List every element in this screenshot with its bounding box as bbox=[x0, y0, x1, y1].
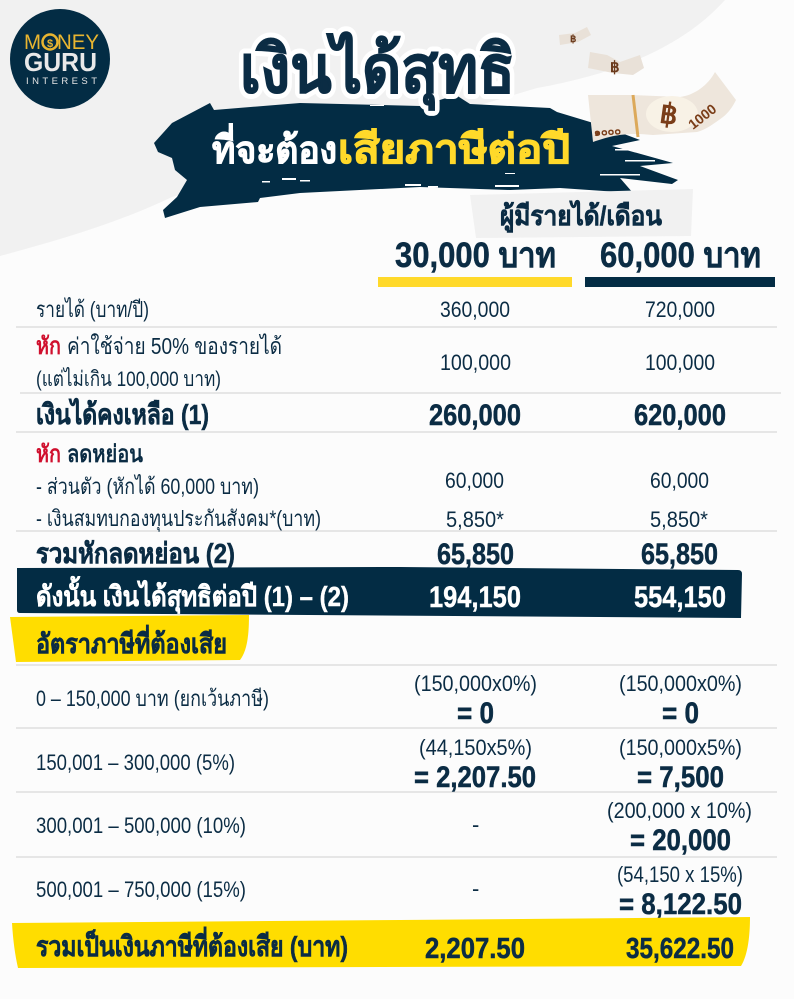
row: expense deduction: หัก bbox=[36, 333, 61, 360]
row: bracket 0%: (150,000x0%) bbox=[414, 671, 537, 696]
row: bracket 0% bbox=[36, 671, 742, 730]
icon: small banknote: ฿ bbox=[570, 34, 576, 45]
row: bracket 15%: = 8,122.50 bbox=[619, 888, 742, 921]
row: income: 720,000 bbox=[645, 297, 715, 322]
logo: $ bbox=[47, 38, 53, 50]
title line 2: ที่จะต้อง bbox=[212, 123, 337, 172]
row: expense deduction: 100,000 bbox=[440, 350, 511, 375]
tab: tax rates heading: อัตราภาษีที่ต้องเสีย bbox=[36, 624, 227, 659]
icon: small banknote bbox=[559, 27, 591, 45]
column header: 60,000: 60,000 บาท bbox=[600, 236, 761, 275]
row: bracket 0%: 0 – 150,000 บาท (ยกเว้นภาษี) bbox=[36, 686, 269, 711]
column header label box bbox=[470, 189, 693, 238]
row: allowances: - ส่วนตัว (หักได้ 60,000 บาท) bbox=[36, 474, 259, 499]
row: expense deduction: (แต่ไม่เกิน 100,000 บาท) bbox=[36, 367, 221, 391]
row: allowances bbox=[36, 441, 709, 532]
row: total allowances: 65,850 bbox=[437, 538, 514, 571]
logo: GURU bbox=[24, 47, 97, 77]
icon: medium banknote: ฿ bbox=[610, 59, 620, 76]
title line 1: เงินได้สุทธิ bbox=[240, 31, 515, 111]
row: bracket 10%: - bbox=[472, 812, 479, 837]
icon: large banknote: ฿ bbox=[658, 97, 680, 131]
row: remaining income: 260,000 bbox=[429, 399, 521, 432]
row: allowances: 60,000 bbox=[445, 468, 504, 493]
row: bracket 10%: (200,000 x 10%) bbox=[607, 798, 752, 823]
row: remaining income: 620,000 bbox=[634, 399, 726, 432]
tab: tax rates heading bbox=[10, 615, 249, 662]
row: allowances: 60,000 bbox=[650, 468, 709, 493]
band: total tax: รวมเป็นเงินภาษีที่ต้องเสีย (บาท) bbox=[36, 926, 348, 962]
row: bracket 5%: = 2,207.50 bbox=[414, 761, 536, 794]
brush stroke bbox=[154, 95, 678, 218]
logo: MONEY bbox=[24, 31, 99, 54]
row: expense deduction: 100,000 bbox=[645, 350, 715, 375]
row: expense deduction bbox=[36, 333, 715, 391]
row: allowances: 5,850* bbox=[650, 507, 708, 532]
logo bbox=[10, 9, 110, 109]
band: total tax: 35,622.50 bbox=[626, 933, 734, 965]
icon: large banknote: 1000 bbox=[685, 100, 720, 132]
row: bracket 10%: 300,001 – 500,000 (10%) bbox=[36, 813, 246, 838]
row: bracket 0%: (150,000x0%) bbox=[619, 671, 742, 696]
row: bracket 15%: (54,150 x 15%) bbox=[617, 862, 743, 887]
icon: large banknote: ๑๐๐๐ bbox=[594, 125, 622, 139]
column header: 60,000 bbox=[585, 236, 775, 287]
row: bracket 10% bbox=[36, 798, 752, 857]
row: allowances: ลดหย่อน bbox=[67, 441, 143, 468]
row: bracket 0%: = 0 bbox=[662, 697, 699, 730]
title line 1: เงินได้สุทธิ bbox=[240, 31, 515, 111]
icon: large banknote bbox=[588, 72, 736, 142]
band: net income: 194,150 bbox=[429, 581, 521, 614]
title line 2: เสียภาษีต่อปี bbox=[338, 128, 570, 172]
row: bracket 5%: (150,000x5%) bbox=[619, 735, 742, 760]
band: net income bbox=[17, 567, 742, 618]
column header label box: ผู้มีรายได้/เดือน bbox=[500, 200, 662, 233]
row: income: รายได้ (บาท/ปี) bbox=[36, 297, 149, 322]
row: allowances: - เงินสมทบกองทุนประกันสังคม*(บาท) bbox=[36, 506, 321, 532]
row: bracket 5%: 150,001 – 300,000 (5%) bbox=[36, 750, 235, 775]
band: net income: ดังนั้น เงินได้สุทธิต่อปี (1) – (2) bbox=[36, 575, 349, 614]
row: total allowances: รวมหักลดหย่อน (2) bbox=[36, 538, 235, 569]
row: income: 360,000 bbox=[440, 297, 510, 322]
row: allowances: หัก bbox=[36, 441, 61, 468]
title line 2 bbox=[212, 123, 570, 172]
row: remaining income: เงินได้คงเหลือ (1) bbox=[36, 398, 209, 430]
column header: 30,000: 30,000 บาท bbox=[395, 236, 556, 275]
row dividers bbox=[16, 326, 781, 858]
row: bracket 5%: (44,150x5%) bbox=[419, 735, 532, 760]
header background curve bbox=[0, 0, 725, 256]
row: bracket 15%: - bbox=[472, 876, 479, 901]
row: total allowances bbox=[36, 538, 718, 571]
row: allowances: 5,850* bbox=[446, 507, 504, 532]
column header: 30,000 bbox=[378, 236, 572, 287]
row: bracket 0%: = 0 bbox=[457, 697, 494, 730]
row: bracket 15%: 500,001 – 750,000 (15%) bbox=[36, 877, 246, 902]
band: total tax: 2,207.50 bbox=[425, 933, 525, 965]
logo: INTEREST bbox=[26, 76, 97, 87]
row: remaining income bbox=[36, 398, 726, 432]
row: expense deduction: ค่าใช้จ่าย 50% ของรายได้ bbox=[67, 333, 282, 359]
row: income bbox=[36, 297, 715, 322]
row: total allowances: 65,850 bbox=[641, 538, 718, 571]
row: bracket 5% bbox=[36, 735, 742, 794]
band: net income: 554,150 bbox=[634, 581, 726, 614]
row: bracket 15% bbox=[36, 862, 743, 921]
band: total tax bbox=[12, 917, 750, 968]
row: bracket 10%: = 20,000 bbox=[630, 824, 731, 857]
icon: medium banknote bbox=[588, 52, 644, 76]
row: bracket 5%: = 7,500 bbox=[637, 761, 724, 794]
